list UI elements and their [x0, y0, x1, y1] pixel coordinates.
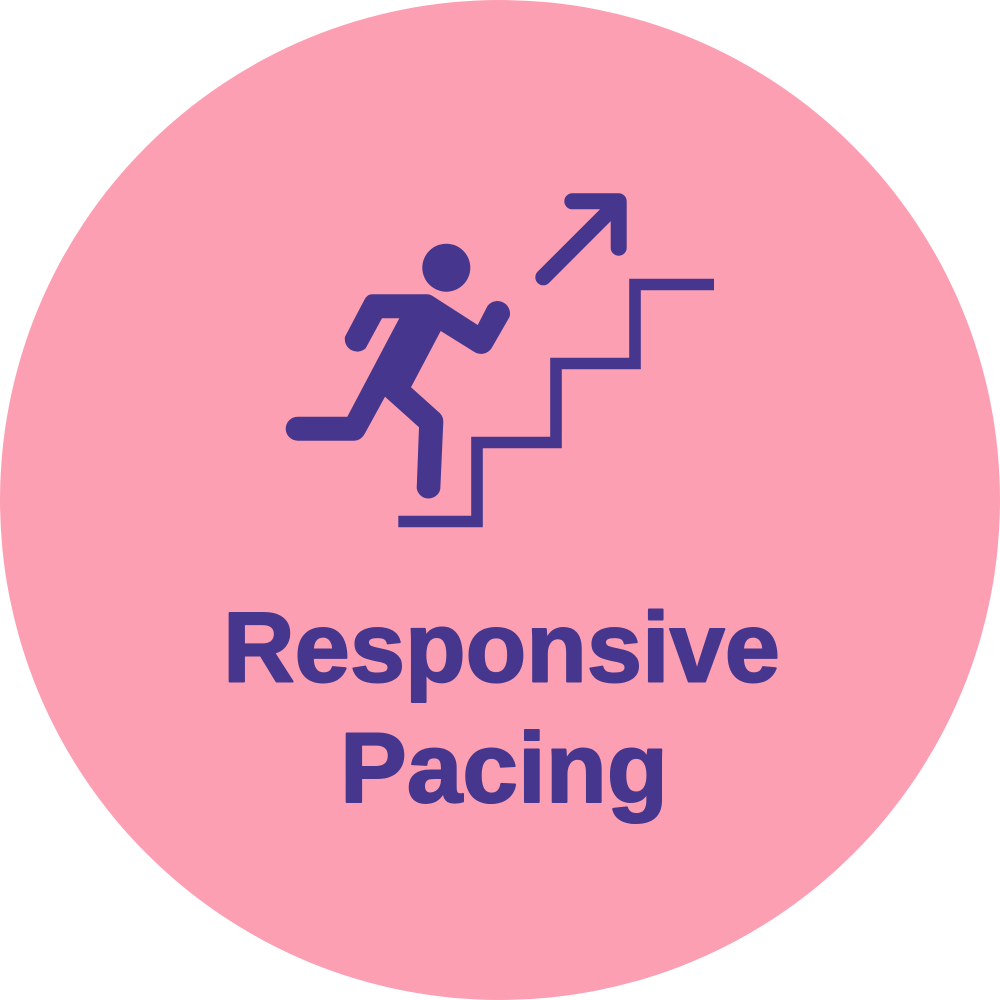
icon: staircase [398, 284, 714, 522]
arrow: up and to the right [543, 201, 619, 277]
title [223, 592, 780, 823]
icon: head [422, 244, 470, 292]
icon: body and limbs [286, 294, 510, 498]
icon: running person [286, 244, 510, 498]
title: Pacing [340, 712, 668, 823]
title: Responsive [223, 592, 780, 702]
